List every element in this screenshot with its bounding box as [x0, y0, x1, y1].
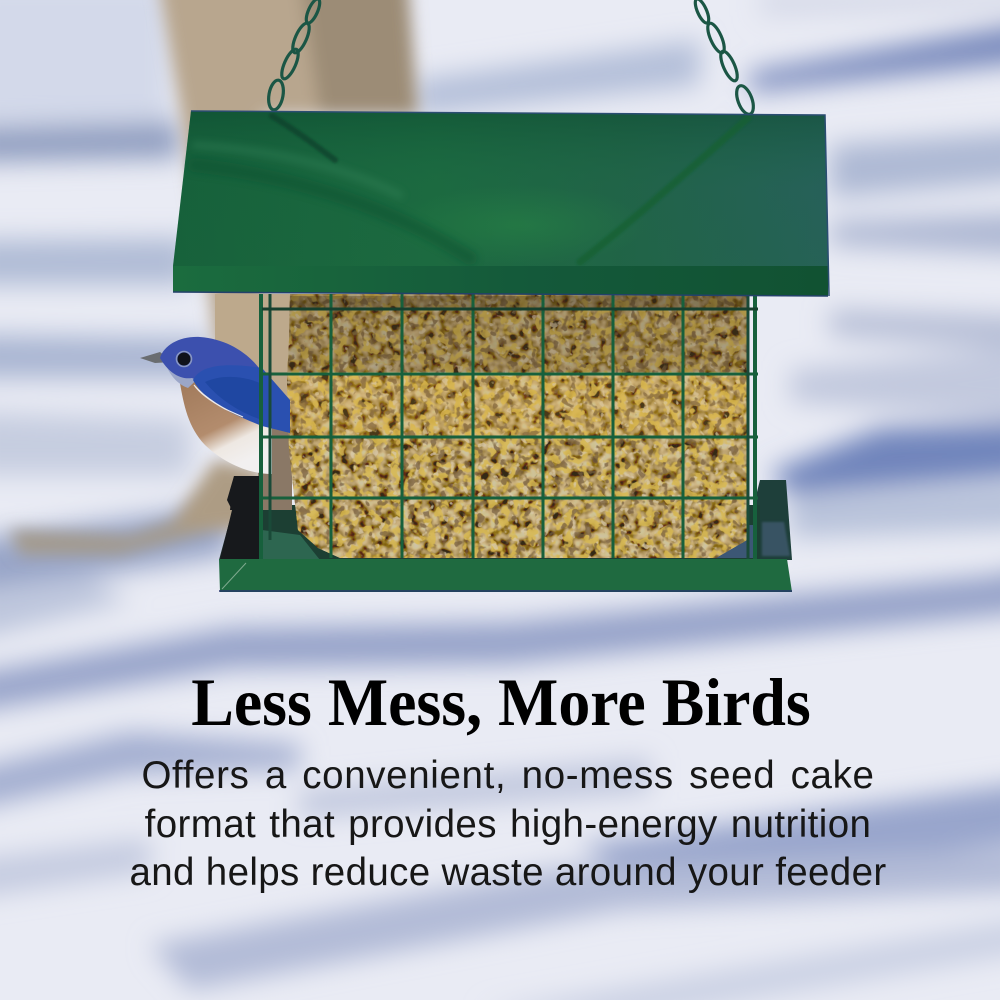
- description text: Offers a convenient, no-mess seed cake: [141, 754, 875, 797]
- bird feet on tray: [220, 476, 262, 560]
- seed cake: [285, 292, 750, 562]
- roof reflections: [195, 116, 748, 262]
- right side bands: [760, 0, 1000, 16]
- description text: format that provides high-energy nutrition: [145, 802, 871, 846]
- bird tail behind cage: [258, 425, 292, 510]
- wire cage: [260, 294, 760, 563]
- tray front lip: [219, 559, 792, 592]
- description text: [129, 754, 887, 894]
- ground stain: [10, 500, 240, 555]
- top section shading: [285, 292, 750, 372]
- description text: and helps reduce waste around your feeder: [129, 851, 887, 894]
- overall warm shade: [285, 292, 750, 562]
- heading: Less Mess, More Birds: [191, 664, 811, 740]
- tray back: [219, 490, 262, 560]
- hanging chains: [267, 0, 757, 116]
- trunk visible through cage: [215, 294, 291, 400]
- roof: [173, 111, 829, 296]
- tree trunk: [158, 0, 418, 345]
- bird: [140, 337, 290, 474]
- left side haze and bands: [0, 0, 170, 125]
- lower diagonal shadows: [0, 572, 1000, 712]
- feeder: [140, 0, 829, 592]
